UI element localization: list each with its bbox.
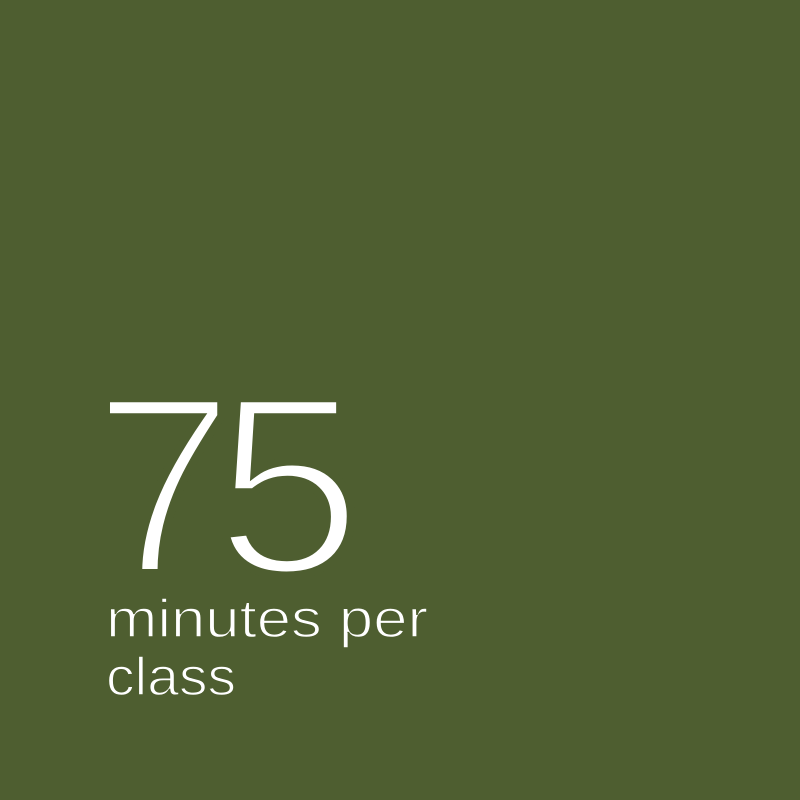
- big number: 75: 7: [93, 343, 234, 627]
- big number: 75: [93, 343, 362, 627]
- big number: 75: 5: [215, 343, 362, 627]
- caption: minutes per class: [106, 589, 428, 707]
- caption line 2: class: [106, 647, 236, 707]
- caption line 1: minutes per: [106, 589, 428, 649]
